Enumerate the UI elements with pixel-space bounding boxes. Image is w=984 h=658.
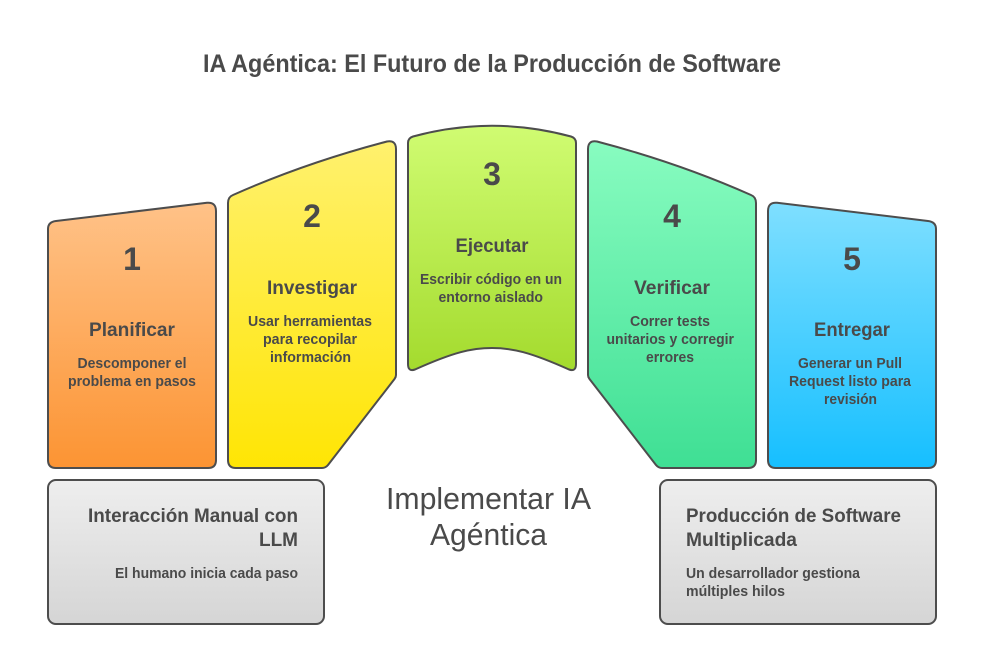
description: step 2 [248, 314, 372, 366]
description: step 3: Escribir código en un [420, 272, 562, 288]
heading: Planificar: Planificar [89, 320, 176, 341]
heading: Verificar: Verificar [634, 278, 711, 299]
description: step 1 [68, 356, 196, 390]
description: start state: El humano inicia cada paso [115, 566, 298, 582]
box: start state [48, 480, 324, 624]
center label: Implementar IA Agéntica: Implementar IA [386, 481, 591, 516]
panel: step 3 Ejecutar [408, 126, 576, 370]
number 4: 4 [663, 198, 681, 234]
heading: Interacción Manual con LLM [88, 506, 298, 551]
heading: Entregar: Entregar [814, 320, 891, 341]
description: end state: Un desarrollador gestiona [686, 566, 861, 582]
description: step 4: unitarios y corregir [606, 332, 734, 348]
center label: Implementar IA Agéntica: Agéntica [430, 517, 548, 552]
heading: Producción de Software Multiplicada [686, 506, 901, 551]
card shape 1 [48, 203, 216, 468]
description: step 5: Request listo para [789, 374, 912, 390]
heading: Producción de Software Multiplicada: Producción de Software [686, 506, 901, 527]
box: end state [660, 480, 936, 624]
panel: step 4 Verificar [588, 141, 756, 468]
number 5: 5 [843, 241, 861, 277]
number 1: 1 [123, 241, 141, 277]
description: step 5: revisión [824, 392, 877, 408]
description: end state [686, 566, 861, 600]
panel: step 2 Investigar [228, 141, 396, 468]
heading: Ejecutar: Ejecutar [456, 236, 529, 257]
description: step 4: errores [646, 350, 694, 366]
title: IA Agéntica: El Futuro de la Producción de Software [203, 50, 781, 78]
card shape 3 [408, 126, 576, 370]
number 2: 2 [303, 198, 321, 234]
number 3: 3 [483, 156, 501, 192]
description: step 5 [789, 356, 912, 408]
card shape 5 [768, 203, 936, 468]
panel: step 1 Planificar [48, 203, 216, 468]
panel: end state, multiplied production [660, 480, 936, 624]
card shape 4 [588, 141, 756, 468]
panel: step 5 Entregar [768, 203, 936, 468]
card shape 2 [228, 141, 396, 468]
description: step 1: problema en pasos [68, 374, 196, 390]
description: step 3: entorno aislado [438, 290, 543, 306]
description: step 1: Descomponer el [78, 356, 186, 372]
panel: start state, manual interaction [48, 480, 324, 624]
description: step 5: Generar un Pull [798, 356, 902, 372]
heading: Investigar: Investigar [267, 278, 358, 299]
description: end state: múltiples hilos [686, 584, 785, 600]
heading: Interacción Manual con LLM: Interacción Manual con [88, 506, 298, 527]
description: step 2: información [270, 350, 351, 366]
description: step 2: para recopilar [263, 332, 357, 348]
heading: Producción de Software Multiplicada: Multiplicada [686, 530, 797, 551]
center label: Implementar IA Agéntica [386, 481, 591, 552]
description: step 4 [606, 314, 734, 366]
description: step 3 [420, 272, 562, 306]
heading: Interacción Manual con LLM: LLM [259, 530, 298, 551]
description: step 2: Usar herramientas [248, 314, 372, 330]
description: step 4: Correr tests [630, 314, 710, 330]
